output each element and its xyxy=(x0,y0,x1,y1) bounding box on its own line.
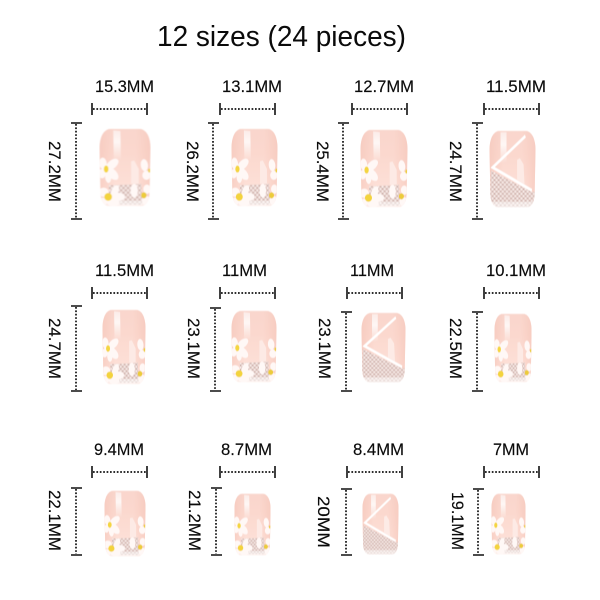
height measure xyxy=(71,306,82,391)
height measure xyxy=(210,308,221,391)
title: 12 sizes (24 pieces) xyxy=(157,21,406,53)
height measure xyxy=(211,488,222,555)
width measure xyxy=(484,103,539,115)
height measure xyxy=(341,489,352,555)
nail xyxy=(362,494,399,554)
width measure xyxy=(484,287,539,299)
width label: 15.3MM xyxy=(95,78,154,96)
nail xyxy=(489,131,536,207)
width measure xyxy=(220,103,275,115)
size 9 xyxy=(45,441,147,556)
nail xyxy=(490,494,526,554)
width measure xyxy=(347,466,402,478)
width label: 9.4MM xyxy=(94,441,144,459)
height measure xyxy=(472,312,483,391)
width label: 12.7MM xyxy=(354,78,414,96)
nail xyxy=(230,129,278,206)
height label: 24.7MM xyxy=(45,318,63,379)
height label: 20MM xyxy=(314,496,332,548)
width measure xyxy=(352,103,407,115)
size 10 xyxy=(185,441,275,555)
width label: 10.1MM xyxy=(486,262,546,280)
height label: 22.1MM xyxy=(45,490,63,551)
width measure xyxy=(92,103,147,115)
size 3 xyxy=(313,78,414,219)
width measure xyxy=(484,466,539,478)
height measure xyxy=(71,488,82,555)
nail xyxy=(361,313,406,382)
nail xyxy=(101,310,146,384)
size 7 xyxy=(315,262,406,391)
width label: 11.5MM xyxy=(486,78,546,96)
nail xyxy=(493,314,532,382)
height measure xyxy=(208,123,219,219)
width measure xyxy=(92,287,147,299)
size 6 xyxy=(184,262,277,391)
size 8 xyxy=(446,262,546,391)
size 4 xyxy=(446,78,546,219)
width label: 11.5MM xyxy=(95,262,154,280)
nail xyxy=(359,130,408,207)
height measure xyxy=(473,489,484,555)
size 5 xyxy=(45,262,154,391)
height label: 21.2MM xyxy=(185,490,203,551)
width label: 11MM xyxy=(222,262,267,280)
width label: 8.4MM xyxy=(353,441,404,459)
height measure xyxy=(71,123,82,219)
size 12 xyxy=(448,441,539,555)
height label: 23.1MM xyxy=(315,318,333,379)
size 2 xyxy=(183,78,282,219)
height measure xyxy=(338,123,349,219)
width measure xyxy=(347,287,402,299)
width label: 13.1MM xyxy=(222,78,282,96)
height label: 27.2MM xyxy=(45,141,63,202)
width measure xyxy=(92,466,147,478)
height label: 23.1MM xyxy=(184,318,202,379)
height label: 24.7MM xyxy=(446,141,464,202)
height label: 22.5MM xyxy=(446,318,464,379)
width measure xyxy=(220,466,275,478)
height label: 26.2MM xyxy=(183,141,201,202)
width label: 8.7MM xyxy=(221,441,272,459)
nail xyxy=(230,311,277,382)
nail xyxy=(97,129,151,206)
height label: 25.4MM xyxy=(313,141,331,202)
nail xyxy=(103,491,146,556)
width label: 7MM xyxy=(493,441,529,459)
width label: 11MM xyxy=(350,262,394,280)
width measure xyxy=(220,287,275,299)
size 11 xyxy=(314,441,404,555)
height measure xyxy=(472,123,483,219)
nail xyxy=(233,494,271,555)
size 1 xyxy=(45,78,154,219)
height measure xyxy=(341,312,352,391)
height label: 19.1MM xyxy=(448,492,466,550)
